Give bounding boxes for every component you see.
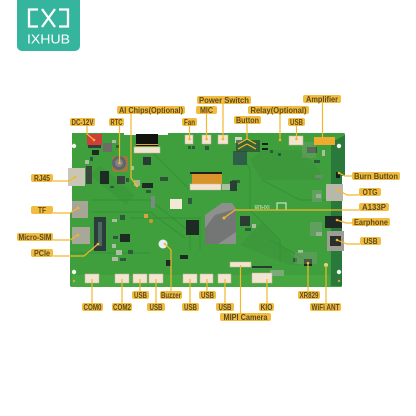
chips center	[120, 137, 323, 276]
callout: USB 4	[199, 279, 216, 300]
pcb	[70, 133, 345, 287]
callout: USB 3	[182, 279, 199, 312]
callout: WiFi ANT	[310, 265, 341, 312]
callout: USB top	[288, 118, 305, 140]
callout: USB right: USB	[364, 237, 378, 246]
callout: USB 5: USB	[218, 303, 232, 312]
callout: PCIe	[31, 243, 99, 258]
callout: Button	[234, 116, 261, 149]
earphone jack	[325, 216, 342, 228]
callout: KIO: KIO	[260, 303, 272, 312]
top connectors	[185, 135, 335, 145]
button group	[236, 140, 268, 152]
callout: Earphone	[336, 218, 390, 227]
callout: Button: Button	[236, 116, 259, 125]
callout: KIO	[259, 279, 274, 312]
logo	[17, 0, 80, 51]
callout: AI Chips	[117, 106, 185, 187]
PCIe slot	[94, 217, 106, 251]
callout: USB right	[336, 237, 381, 246]
callout: TF: TF	[38, 206, 46, 215]
callout: Fan: Fan	[184, 118, 195, 127]
logo: IXHUB	[27, 32, 70, 46]
bottom connectors	[85, 262, 272, 283]
callout: MIC	[196, 106, 217, 140]
traces	[70, 150, 330, 265]
callout: Relay	[248, 106, 309, 141]
Micro-SIM slot	[72, 227, 90, 244]
callout: USB 2: USB	[150, 303, 163, 312]
callout: MIPI Camera: MIPI Camera	[224, 313, 268, 322]
callout: Burn Button: Burn Button	[354, 172, 398, 181]
corner mounting holes	[72, 144, 341, 282]
RTC battery	[112, 156, 128, 172]
callout: USB 1	[132, 279, 149, 300]
callout: OTG: OTG	[362, 188, 378, 197]
callout: COM0	[82, 279, 103, 312]
buzzer	[158, 240, 168, 248]
callout: COM0: COM0	[84, 303, 102, 312]
callout: PCIe: PCIe	[34, 249, 50, 258]
A133P processor shield	[205, 203, 236, 244]
TF slot	[72, 201, 88, 218]
small components	[85, 140, 325, 262]
callout: AI Chips: AI Chips(Optional)	[119, 106, 183, 115]
callout: XR829	[298, 262, 320, 300]
callout: Power Switch	[197, 96, 251, 140]
callout: USB top: USB	[290, 118, 303, 127]
callout: USB 3: USB	[184, 303, 197, 312]
callout: Fan	[182, 118, 197, 140]
board silkscreen logo: IXHUB	[254, 203, 270, 209]
callout: Power Switch: Power Switch	[199, 96, 249, 105]
RJ45 jack	[68, 168, 85, 186]
callout: RJ45	[31, 174, 76, 183]
callout: MIC: MIC	[200, 106, 213, 115]
callout: XR829: XR829	[300, 291, 319, 300]
callout: Relay: Relay(Optional)	[250, 106, 307, 115]
callout: OTG	[337, 188, 381, 197]
callout: Micro-SIM	[17, 233, 79, 242]
callout: COM2	[112, 279, 132, 312]
white small socket	[170, 199, 182, 209]
callout: RTC: RTC	[110, 118, 123, 127]
callout: USB 2	[147, 279, 165, 312]
callout: Earphone: Earphone	[354, 218, 388, 227]
callout: USB 1: USB	[134, 291, 147, 300]
callout: MIPI Camera	[220, 265, 271, 322]
callout: Buzzer: Buzzer	[161, 291, 181, 300]
board silkscreen logo	[254, 203, 286, 210]
callout: A133P	[222, 203, 389, 220]
callout: Amplifier: Amplifier	[306, 95, 338, 104]
callout: USB 5	[216, 279, 234, 312]
callout: Buzzer	[160, 243, 182, 300]
OTG port	[326, 184, 343, 201]
callout: Amplifier	[303, 95, 341, 138]
callout: A133P: A133P	[362, 203, 387, 212]
yellow flex connector	[190, 172, 222, 190]
callout: RTC	[109, 118, 124, 164]
callout: COM2: COM2	[113, 303, 131, 312]
callout: USB 4: USB	[201, 291, 214, 300]
display FPC connector top	[134, 134, 160, 153]
USB port	[327, 231, 344, 251]
callout: RJ45: RJ45	[34, 174, 50, 183]
power chips left	[86, 143, 168, 208]
callout: Micro-SIM: Micro-SIM	[18, 233, 52, 242]
callout: DC-12V: DC-12V	[72, 118, 94, 127]
burn button	[336, 172, 340, 178]
DC-12V power switch	[87, 134, 102, 148]
callout: TF	[31, 206, 79, 215]
callout: WiFi ANT: WiFi ANT	[312, 303, 340, 312]
callout: DC-12V	[70, 118, 95, 141]
circuit board	[68, 133, 345, 287]
WiFi antenna pad	[324, 263, 328, 267]
